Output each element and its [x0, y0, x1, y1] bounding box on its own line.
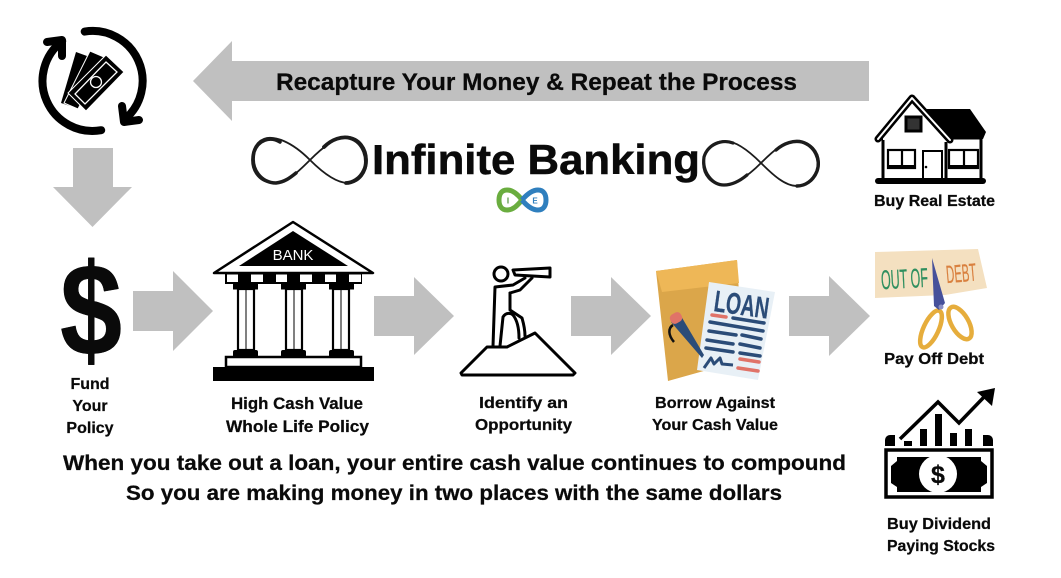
arrow: fund to bank [133, 271, 213, 351]
icon: out of debt scissors [875, 249, 987, 350]
text: explanation: So you are making money in two places with the same dollars [126, 482, 782, 505]
label: identify an opportunity: Identify an [479, 395, 568, 412]
icon: dividend stocks: $ [931, 461, 945, 489]
label: buy dividend paying stocks: Paying Stocks [887, 538, 995, 555]
label: high cash value whole life policy [226, 395, 370, 436]
logo: IE infinity [499, 190, 546, 210]
label: identify an opportunity [475, 395, 572, 434]
label: fund your policy: Policy [66, 420, 114, 437]
label: high cash value whole life policy: High Cash Value [231, 395, 363, 413]
icon: person with telescope on hill [461, 267, 575, 375]
logo: IE infinity: E [532, 196, 538, 206]
label: fund your policy: Your [72, 398, 108, 415]
text: explanation: When you take out a loan, your entire cash value continues to compound [63, 452, 846, 475]
arrow: recapture (left) [193, 41, 869, 121]
label: buy dividend paying stocks: Buy Dividend [887, 516, 991, 533]
icon: bank: BANK [273, 247, 313, 264]
label: pay off debt: Pay Off Debt [884, 351, 985, 368]
icon: infinity right [703, 141, 819, 186]
icon: infinity left [252, 137, 367, 183]
label: fund your policy: Fund [70, 376, 110, 393]
label: buy real estate: Buy Real Estate [874, 193, 995, 210]
icon: bank [213, 222, 374, 381]
icon: loan envelope and document [656, 260, 775, 381]
logo: IE infinity: I [507, 196, 509, 206]
title: Infinite Banking [372, 136, 700, 183]
label: fund your policy [66, 376, 114, 437]
label: high cash value whole life policy: Whole Life Policy [226, 418, 370, 436]
arrow: opportunity to borrow [571, 277, 651, 355]
arrow: bank to opportunity [374, 277, 454, 355]
icon: dollar sign: $ [60, 236, 122, 383]
icon: out of debt scissors: DEBT [945, 259, 977, 289]
icon: house [875, 98, 986, 184]
arrow: borrow to outcomes [789, 276, 870, 356]
icon: money cycle [43, 31, 143, 131]
text: explanation [63, 452, 846, 505]
icon: out of debt scissors: OUT OF [880, 263, 929, 295]
icon: loan envelope and document: LOAN [712, 285, 771, 326]
label: buy dividend paying stocks [887, 516, 995, 555]
label: borrow against your cash value [652, 395, 778, 434]
text: recapture heading: Recapture Your Money & Repeat the Process [276, 69, 797, 96]
arrow: down to fund policy [53, 148, 132, 227]
label: borrow against your cash value: Your Cash Value [652, 417, 778, 434]
label: borrow against your cash value: Borrow Against [655, 395, 776, 412]
label: identify an opportunity: Opportunity [475, 417, 572, 434]
icon: dividend stocks [885, 388, 995, 497]
